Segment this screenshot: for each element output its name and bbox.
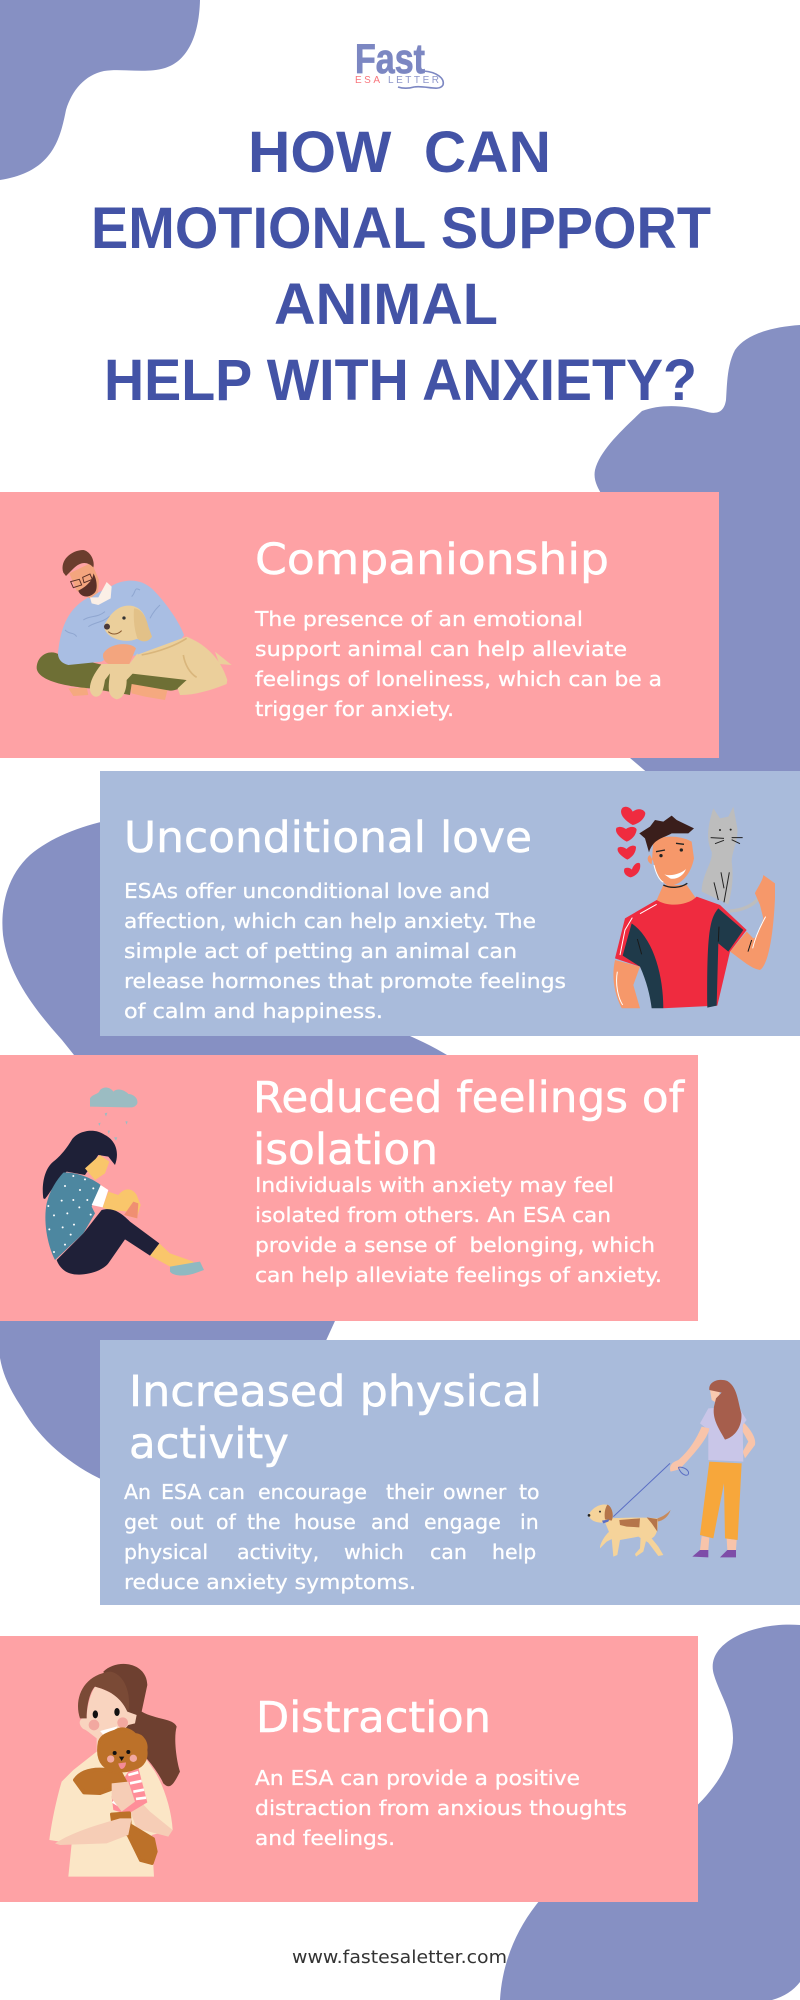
body text: feelings of loneliness, which can be a [255,667,662,691]
panel background [100,1340,800,1605]
heading: Companionship [255,535,609,585]
body text: ESAs offer unconditional love and [124,879,490,903]
panel: unconditional love [100,771,800,1036]
body text [255,1766,627,1850]
heading: Distraction [256,1693,491,1743]
body text: An [124,1480,151,1504]
heading: Increased physical [129,1367,542,1417]
title [91,120,711,413]
body text: trigger for anxiety. [255,697,454,721]
body text: the [247,1510,281,1534]
illustration: sad girl under cloud [43,1087,204,1276]
body text: can [208,1480,245,1504]
logo [355,35,443,88]
logo swirl [398,71,443,88]
body text: owner [443,1480,507,1504]
panel: reduced feelings of isolation [0,1055,698,1321]
blob: top left [0,0,200,180]
body text: simple act of petting an animal can [124,939,517,963]
logo wordmark: Fast [355,35,425,82]
panel background [0,1636,698,1902]
panel: increased physical activity: activity [129,1419,289,1469]
panel: reduced feelings of isolation: isolation [253,1125,438,1175]
body text: reduce anxiety symptoms. [124,1570,416,1594]
body text [255,1173,662,1287]
blob: left lower [0,1310,340,1485]
blob: left middle [2,820,455,1060]
panel background [0,1055,698,1321]
body text: affection, which can help anxiety. The [124,909,536,933]
panel: increased physical activity [100,1340,800,1605]
body text: to [519,1480,540,1504]
body text: in [520,1510,539,1534]
cloud [90,1087,137,1107]
heading: Reduced feelings of [253,1073,685,1123]
title: ANIMAL [274,272,498,337]
body text: get [124,1510,158,1534]
body text: out [170,1510,204,1534]
logo LETTER: LETTER [388,75,439,86]
body text: help [492,1540,536,1564]
blob: right of title [595,325,800,775]
body text: engage [424,1510,501,1534]
body text: distraction from anxious thoughts [255,1796,627,1820]
body text: support animal can help alleviate [255,637,627,661]
logo ESA: ESA [355,75,380,86]
title: HELP WITH ANXIETY? [104,348,697,413]
body text: can help alleviate feelings of anxiety. [255,1263,662,1287]
body text: and [371,1510,410,1534]
body text [254,607,662,721]
body text: their [386,1480,434,1504]
body text: The presence of an emotional [254,607,583,631]
body text [124,879,566,1023]
illustration: man hugging dog [37,550,232,700]
illustration: man with cat and hearts [613,807,775,1008]
body text: and feelings. [255,1826,395,1850]
body text: release hormones that promote feelings [124,969,566,993]
leash [613,1463,689,1517]
body text: provide a sense of belonging, which [255,1233,655,1257]
body text: ESA [161,1480,201,1504]
body text: can [430,1540,467,1564]
panel background [0,492,719,758]
body text: of [216,1510,237,1534]
body text [124,1480,540,1594]
body text: An ESA can provide a positive [255,1766,580,1790]
title: HOW CAN [248,120,551,185]
body text: physical [124,1540,208,1564]
heading: Unconditional love [124,813,532,863]
hearts [616,807,645,877]
illustration: girl holding poodle [49,1664,180,1877]
body text: activity, [237,1540,319,1564]
body text: of calm and happiness. [124,999,383,1023]
title: EMOTIONAL SUPPORT [91,196,711,261]
blob: bottom right [500,1625,800,2000]
body text: which [344,1540,404,1564]
footer url: www.fastesaletter.com [292,1947,507,1968]
body text: house [294,1510,356,1534]
body text: Individuals with anxiety may feel [255,1173,614,1197]
panel background [100,771,800,1036]
illustration: woman walking dog [588,1380,755,1557]
body text: isolated from others. An ESA can [255,1203,611,1227]
body text: encourage [258,1480,367,1504]
panel: distraction [0,1636,698,1902]
panel: companionship [0,492,719,758]
